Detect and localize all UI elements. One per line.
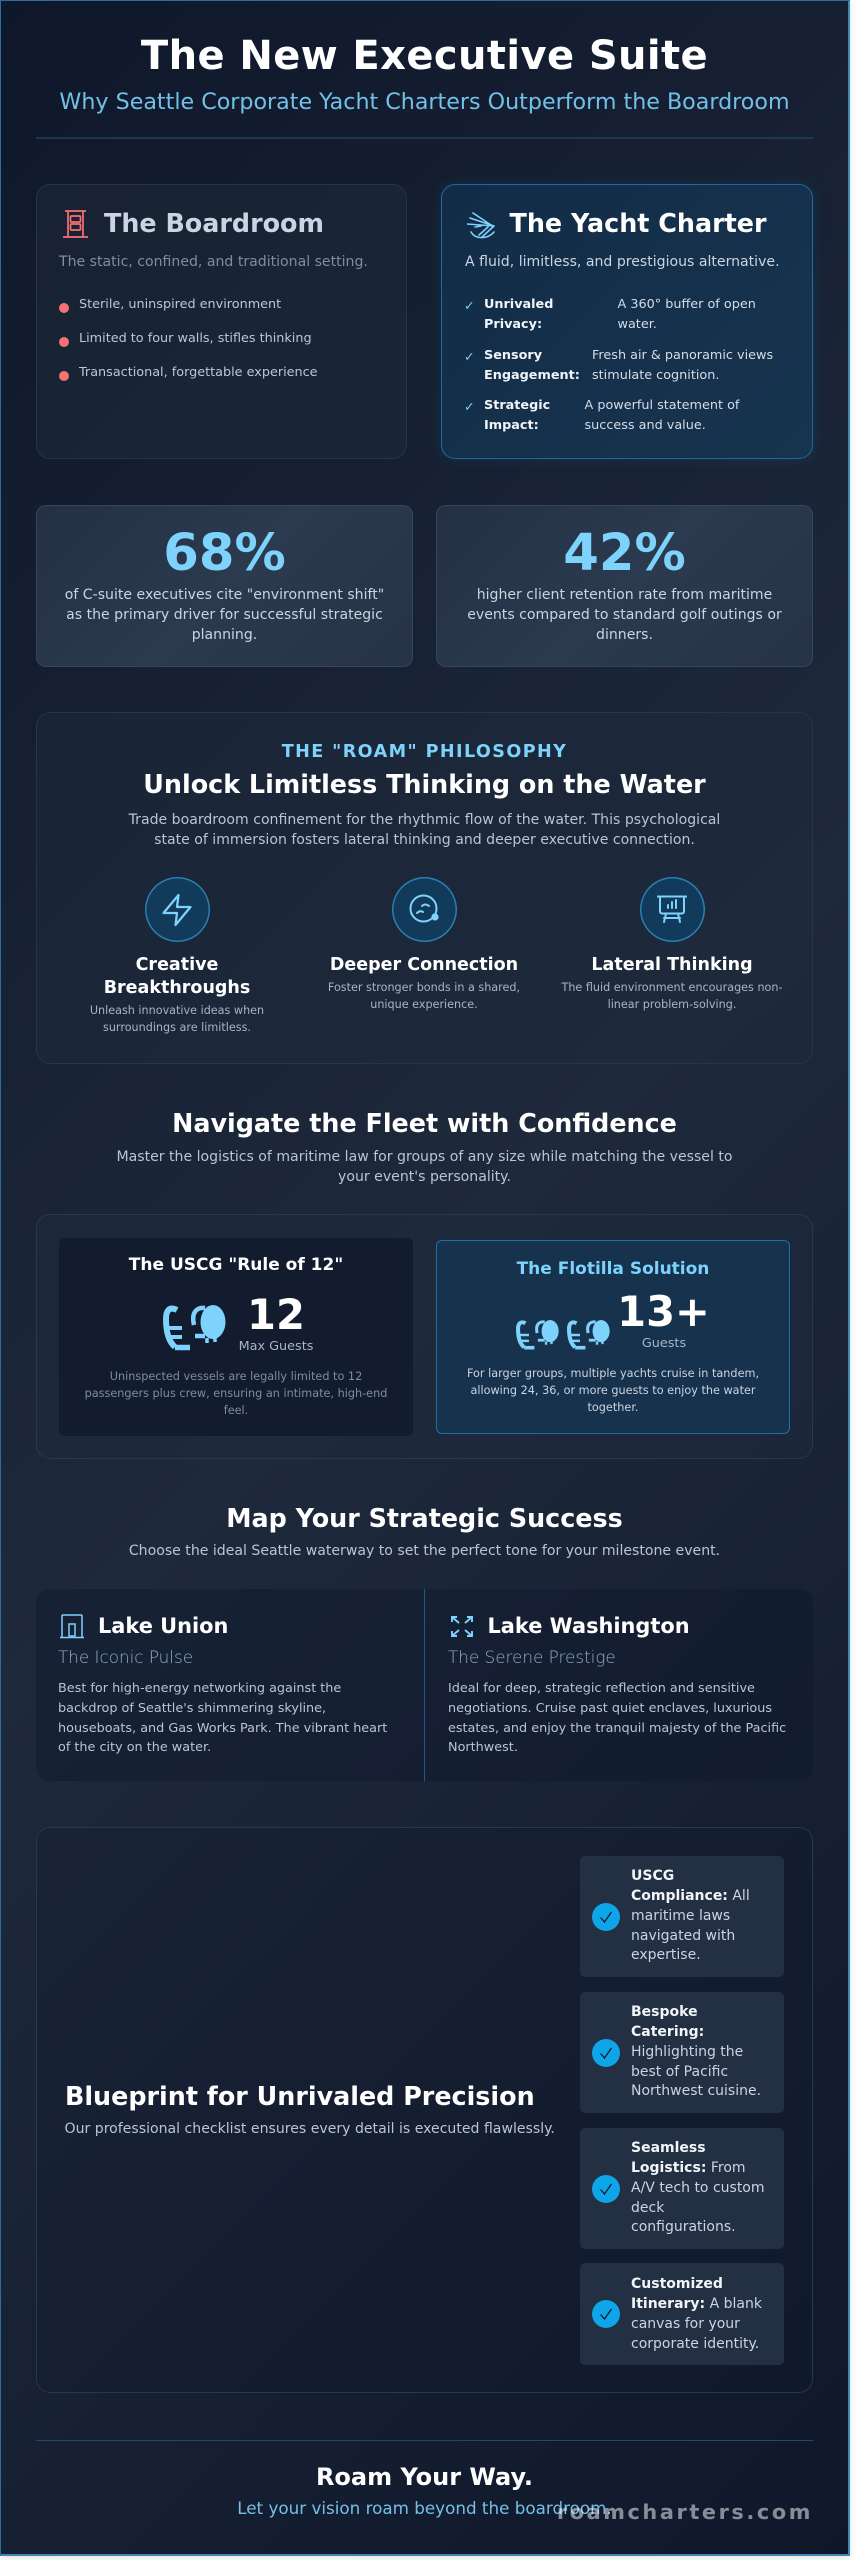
card text: Uninspected vessels are legally limited to 12 [110, 1370, 362, 1382]
benefit: privacy: Unrivaled [484, 297, 553, 312]
footer divider [36, 2440, 813, 2441]
lake tagline: The Serene Prestige [448, 1647, 616, 1667]
lake text: Northwest. [448, 1740, 518, 1755]
item text: configurations. [631, 2219, 736, 2235]
item text: Bespoke [631, 2004, 698, 2020]
intro text: Master the logistics of maritime law for groups of any size while matching the vessel to [116, 1149, 732, 1165]
item text [631, 2004, 761, 2099]
stat description: as the primary driver for successful strategic [66, 607, 383, 623]
item text: Catering: [631, 2024, 704, 2040]
subtitle: Why Seattle Corporate Yacht Charters Outperform the Boardroom [59, 89, 790, 115]
pillar text: Foster stronger bonds in a shared, [328, 980, 520, 994]
card text [85, 1370, 387, 1416]
benefit: strategic: ✓ [464, 400, 475, 415]
icon: waves [467, 212, 495, 238]
item text: Highlighting the [631, 2044, 743, 2060]
benefit: strategic: A powerful statement of [584, 398, 739, 413]
item text [631, 2275, 762, 2354]
lake heading: Lake Washington [488, 1614, 690, 1638]
card heading: The Flotilla Solution [517, 1259, 709, 1279]
panel: the yacht charter [441, 184, 813, 459]
stat description: higher client retention rate from maritime [477, 587, 772, 603]
pillar heading [104, 955, 250, 998]
lake text [448, 1681, 786, 1755]
item text: corporate identity. [631, 2336, 759, 2352]
lake text: negotiations. Cruise past quiet enclaves, luxurious [448, 1701, 772, 1716]
icon: guests group 2 [567, 1320, 610, 1350]
checklist item: logistics [580, 2128, 784, 2249]
icon: boardroom building [63, 210, 88, 238]
panel: roam philosophy [36, 712, 813, 1064]
list item: Transactional, forgettable experience [79, 365, 318, 380]
stat description [467, 587, 782, 643]
benefit: privacy: water. [618, 317, 657, 332]
card heading: The USCG "Rule of 12" [129, 1255, 343, 1275]
panel: blueprint checklist [36, 1827, 813, 2393]
icon: lightning [144, 877, 210, 942]
lake divider [424, 1589, 425, 1781]
pillar text: surroundings are limitless. [103, 1020, 251, 1034]
benefit: strategic: success and value. [584, 418, 706, 433]
benefit: privacy [464, 297, 756, 332]
lake heading: Lake Union [98, 1614, 228, 1638]
eyebrow: THE "ROAM" PHILOSOPHY [282, 742, 567, 762]
benefit: privacy: A 360° buffer of open [618, 297, 756, 312]
item text: A/V tech to custom [631, 2180, 765, 2196]
philosophy heading: Unlock Limitless Thinking on the Water [143, 769, 706, 799]
icon: check [592, 2175, 620, 2203]
philosophy text [128, 812, 720, 848]
lake tagline: The Iconic Pulse [58, 1647, 193, 1667]
footer tagline: Let your vision roam beyond the boardroom. [237, 2498, 612, 2518]
stat card: 68% [36, 505, 413, 667]
stat description: events compared to standard golf outings or [467, 607, 782, 623]
card text: For larger groups, multiple yachts cruise in tandem, [467, 1366, 759, 1380]
footer [36, 2440, 813, 2530]
guest number: 13+ [617, 1287, 710, 1336]
icon: check [592, 1903, 620, 1931]
card: rule of 12 [59, 1238, 413, 1436]
icon: presentation chart [640, 877, 704, 942]
blueprint heading: Blueprint for Unrivaled Precision [65, 2081, 535, 2111]
benefit: privacy: ✓ [464, 299, 475, 314]
list item: Sterile, uninspired environment [79, 297, 281, 312]
icon: skyline [60, 1614, 84, 1638]
item text: canvas for your [631, 2316, 740, 2332]
pillar text [328, 980, 520, 1010]
stat description [65, 587, 384, 643]
item text: Itinerary: A blank [631, 2296, 762, 2312]
stat description: dinners. [596, 627, 653, 643]
watermark: roamcharters.com [557, 2500, 813, 2524]
boardroom subtitle: The static, confined, and traditional setting. [59, 254, 368, 270]
panel: the boardroom [36, 184, 407, 459]
intro text [116, 1149, 732, 1185]
icon: connection [392, 877, 456, 942]
heading: Map Your Strategic Success [226, 1503, 623, 1533]
pillar text: The fluid environment encourages non- [561, 980, 783, 994]
card text: feel. [224, 1404, 248, 1416]
title: The New Executive Suite [141, 33, 708, 79]
pillar text: Unleash innovative ideas when [90, 1004, 264, 1016]
checklist item: itinerary [580, 2263, 784, 2365]
checklist item: catering [580, 1992, 784, 2113]
lake text: Best for high-energy networking against the [58, 1681, 341, 1696]
icon: expand arrows [451, 1616, 473, 1637]
item text: deck [631, 2200, 664, 2216]
guest label: Max Guests [239, 1339, 313, 1354]
pillar heading: Deeper Connection [330, 955, 518, 975]
footer heading: Roam Your Way. [316, 2463, 533, 2491]
benefit: privacy: Privacy: [484, 317, 542, 332]
item text: Customized [631, 2276, 723, 2292]
stat description: of C-suite executives cite "environment shift" [65, 587, 384, 603]
panel: waterways [36, 1589, 813, 1781]
pillar heading: Breakthroughs [104, 978, 250, 998]
map section heading [129, 1503, 720, 1559]
boardroom heading: The Boardroom [104, 208, 324, 238]
lake text: backdrop of Seattle's shimmering skyline, [58, 1701, 326, 1716]
item text [631, 2140, 765, 2235]
pillar: creative breakthroughs [90, 877, 264, 1034]
pillar text: linear problem-solving. [608, 998, 736, 1010]
panel: fleet [36, 1214, 813, 1459]
benefit: sensory [464, 348, 773, 383]
blueprint text: Our professional checklist ensures every detail is executed flawlessly. [64, 2121, 555, 2137]
item text: maritime laws [631, 1908, 730, 1924]
lake text: Ideal for deep, strategic reflection and sensitive [448, 1681, 755, 1696]
yacht heading: The Yacht Charter [510, 208, 766, 238]
item text [631, 1868, 750, 1963]
lake text: of the city on the water. [58, 1740, 211, 1755]
pillar: lateral thinking [561, 877, 783, 1010]
benefit: sensory: Fresh air & panoramic views [592, 348, 773, 363]
guest number: 12 [247, 1290, 305, 1339]
card text: passengers plus crew, ensuring an intimate, high-end [85, 1386, 387, 1400]
item text: Seamless [631, 2140, 706, 2156]
fleet section heading [116, 1108, 732, 1185]
pillar text: unique experience. [370, 998, 478, 1010]
benefit: strategic [464, 398, 740, 433]
philosophy text: Trade boardroom confinement for the rhythmic flow of the water. This psychological [129, 812, 720, 828]
benefit: strategic: Impact: [484, 418, 539, 433]
card text: allowing 24, 36, or more guests to enjoy the water [470, 1384, 756, 1396]
stat number: 42% [563, 523, 686, 583]
philosophy text: state of immersion fosters lateral thinking and deeper executive connection. [154, 832, 695, 848]
card text [467, 1366, 759, 1414]
item text: Compliance: All [631, 1888, 750, 1904]
pillar: deeper connection [328, 877, 520, 1010]
boardroom list [59, 297, 318, 381]
item text: navigated with [631, 1928, 735, 1944]
item text: expertise. [631, 1947, 701, 1963]
lake text [58, 1681, 387, 1755]
benefit: strategic: Strategic [484, 398, 550, 413]
guest label: Guests [642, 1336, 686, 1351]
icon: check [592, 2039, 620, 2067]
stat card: 42% [436, 505, 813, 667]
card: flotilla solution [436, 1240, 790, 1434]
benefit: sensory: ✓ [464, 350, 475, 365]
heading: Navigate the Fleet with Confidence [172, 1108, 677, 1138]
benefit: sensory: Engagement: [484, 368, 580, 383]
lake text: houseboats, and Gas Works Park. The vibrant heart [58, 1721, 387, 1736]
stat number: 68% [163, 523, 286, 583]
header [36, 33, 813, 139]
item text: Logistics: From [631, 2160, 746, 2176]
card text: together. [588, 1400, 638, 1414]
item text: USCG [631, 1868, 674, 1884]
icon: guests [163, 1305, 226, 1350]
benefit: sensory: Sensory [484, 348, 542, 363]
pillar heading: Lateral Thinking [591, 955, 753, 975]
yacht subtitle: A fluid, limitless, and prestigious alternative. [465, 254, 780, 270]
pillar text [561, 980, 783, 1010]
intro text: your event's personality. [338, 1169, 511, 1185]
intro text: Choose the ideal Seattle waterway to set the perfect tone for your milestone event. [129, 1543, 720, 1559]
stat description: planning. [192, 627, 257, 643]
pillar text [90, 1004, 264, 1034]
lake union [58, 1614, 387, 1755]
benefit: sensory: stimulate cognition. [592, 368, 719, 383]
header divider [36, 137, 813, 139]
icon: check [592, 2300, 620, 2328]
lake washington [448, 1614, 786, 1755]
lake text: estates, and enjoy the tranquil majesty of the Pacific [448, 1721, 786, 1736]
item text: best of Pacific [631, 2064, 728, 2080]
pillar heading: Creative [136, 955, 218, 975]
icon: guests group 1 [516, 1320, 559, 1350]
checklist item: compliance [580, 1856, 784, 1977]
list item: Limited to four walls, stifles thinking [79, 331, 312, 346]
item text: Northwest cuisine. [631, 2083, 761, 2099]
